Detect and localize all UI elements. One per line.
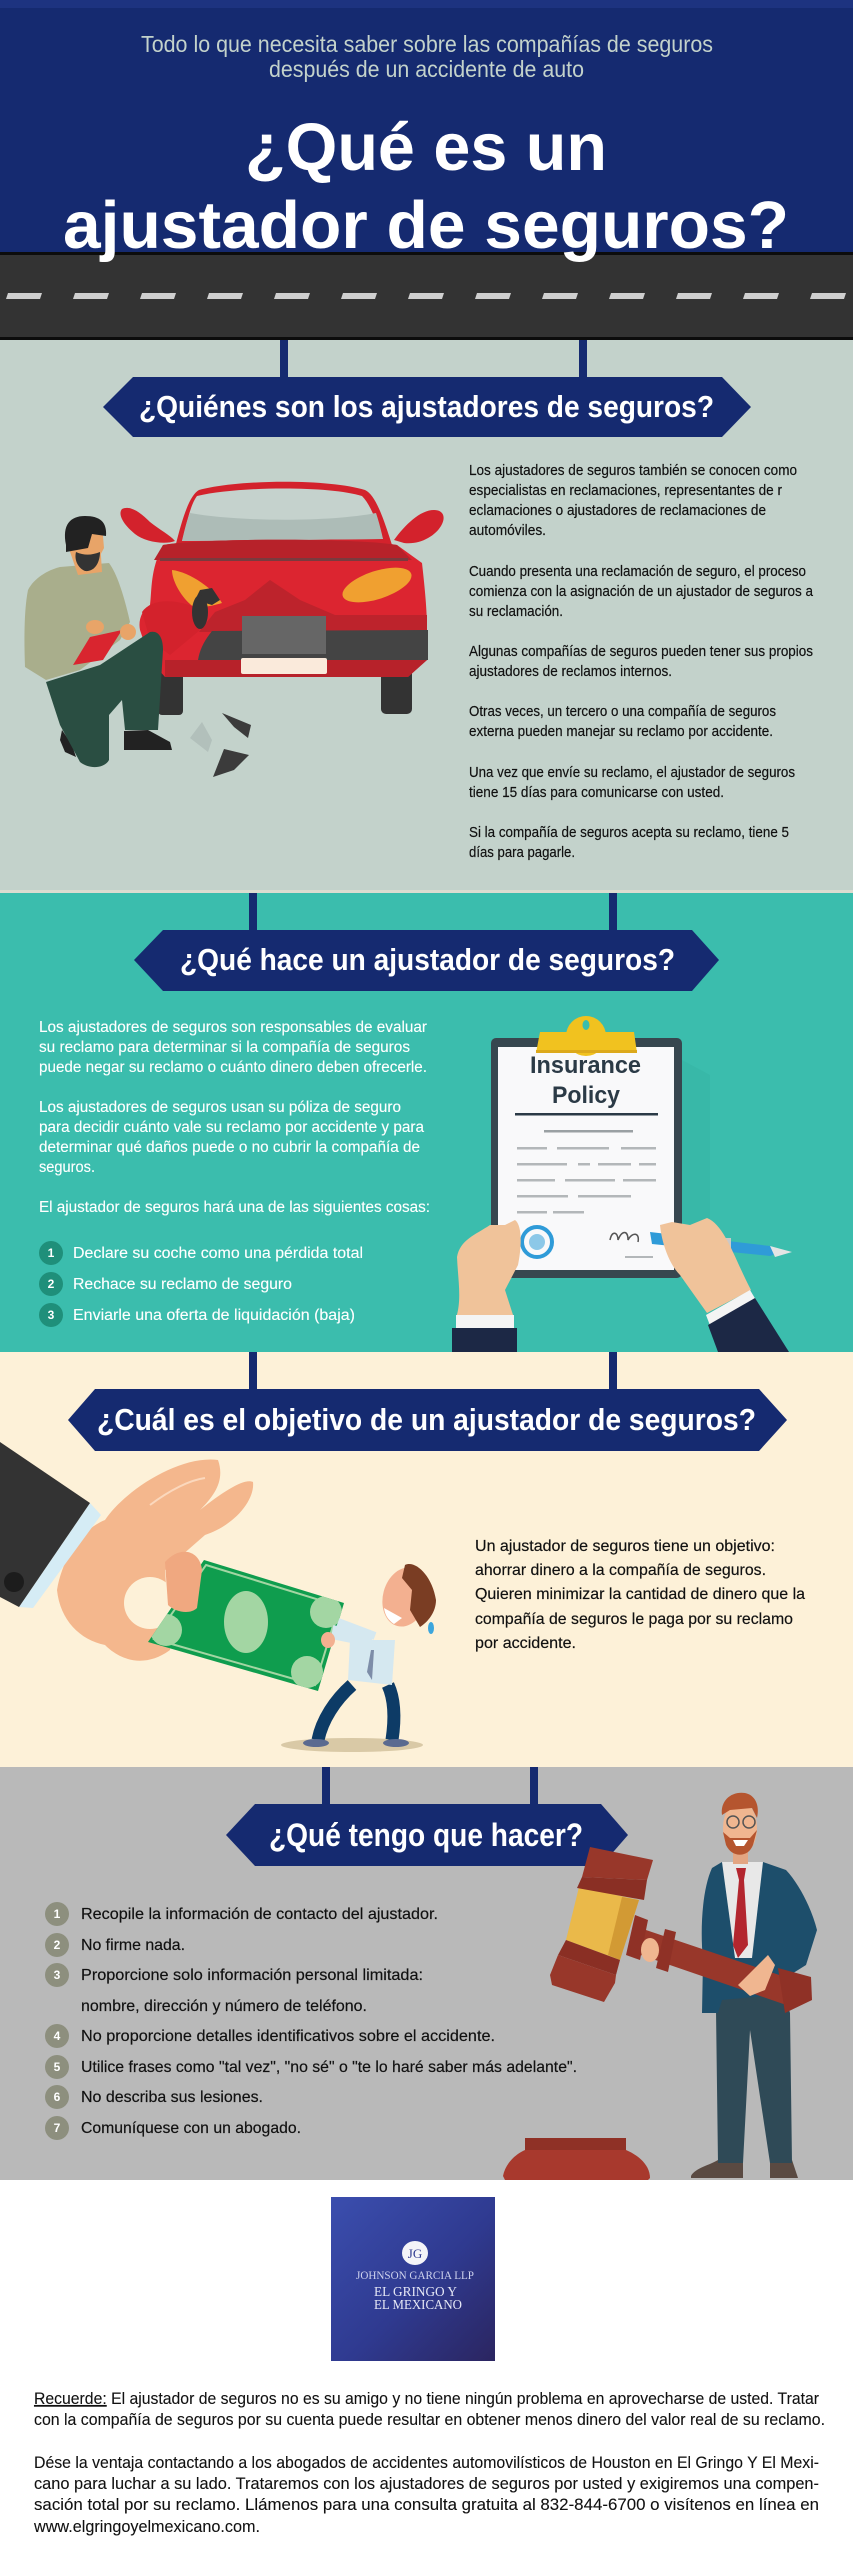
numbered list: qué hacer: 6 [54,2090,61,2104]
numbered list: qué hacer: 3 [54,1968,61,1982]
subtitle [141,31,713,82]
panel: objetivo [0,1352,853,1767]
illustration: insurance policy clipboard [491,1016,710,1290]
numbered list: qué hacer: 2 [54,1938,61,1952]
numbered list: qué hacer: 7 [54,2121,61,2135]
text block: quiénes son: automóviles. [469,523,546,539]
heading banner [226,1804,628,1866]
text block: quiénes son: Si la compañía de seguros acepta su reclamo, tiene 5 [469,825,789,841]
numbered list: qué hacer: 5 [54,2060,61,2074]
numbered list: qué hacer: Utilice frases como "tal vez", "no sé" o "te lo haré saber más adelante". [81,2059,577,2076]
numbered list: qué hacer: Proporcione solo información personal limitada: [81,1967,423,1984]
text block: contacto: www.elgringoyelmexicano.com. [33,2518,260,2536]
text block: recuerde: Recuerde: El ajustador de seguros no es su amigo y no tiene ningún problema en aprovecharse de usted. Tratar [34,2390,819,2408]
text block: recuerde: con la compañía de seguros por su cuenta puede resultar en obtener menos dinero del valor real de su reclamo. [34,2411,825,2429]
text block: objetivo: Un ajustador de seguros tiene un objetivo: [475,1538,775,1555]
numbered list: qué hace: Rechace su reclamo de seguro [73,1276,292,1293]
numbered list: qué hace: 3 [48,1308,55,1322]
text block: objetivo: compañía de seguros le paga por su reclamo [475,1611,793,1628]
panel: qué hace [0,893,853,1352]
text block: qué hace: su reclamo para determinar si la compañía de seguros [39,1039,410,1056]
numbered list: qué hace: 2 [48,1277,55,1291]
illustration: adjuster man [24,516,172,767]
text block: objetivo: ahorrar dinero a la compañía de seguros. [475,1562,766,1579]
text block: qué hace: puede negar su reclamo o cuánto dinero deben ofrecerle. [39,1059,427,1076]
text block: quiénes son [469,463,814,861]
title: ¿Qué es un [245,110,607,185]
text block: recuerde [34,2390,825,2429]
text block: objetivo: Quieren minimizar la cantidad de dinero que la [475,1586,805,1603]
numbered list: qué hace: Enviarle una oferta de liquidación (baja) [73,1307,355,1324]
title [63,110,789,263]
illustration: man pulling money [281,1562,436,1752]
text block: contacto: Dése la ventaja contactando a los abogados de accidentes automovilísticos de Houston en El Gringo Y El Mexi- [34,2454,819,2472]
text block: quiénes son: Los ajustadores de seguros también se conocen como [469,463,797,479]
numbered list: qué hace: 1 [48,1246,55,1260]
numbered list: qué hacer: Recopile la información de contacto del ajustador. [81,1906,438,1923]
text block: qué hace: para decidir cuánto vale su reclamo por accidente y para [39,1119,424,1136]
text block: quiénes son: ajustadores de reclamos internos. [469,664,672,680]
illustration: debris [190,713,251,777]
text block: objetivo [475,1538,805,1652]
text block: qué hace: seguros. [39,1159,95,1176]
heading banner: ¿Qué tengo que hacer? [269,1817,583,1853]
logo: JOHNSON GARCIA LLP [356,2268,474,2282]
text block: quiénes son: externa pueden manejar su reclamo por accidente. [469,724,773,740]
text block: qué hace: Los ajustadores de seguros son responsables de evaluar [39,1019,427,1036]
panel: qué tengo que hacer [0,1767,853,2180]
subtitle: Todo lo que necesita saber sobre las compañías de seguros [141,31,713,57]
logo: EL GRINGO Y [374,2285,457,2300]
text block: quiénes son: Algunas compañías de seguros pueden tener sus propios [469,644,813,660]
text block: quiénes son: días para pagarle. [469,845,575,861]
text block: contacto: sación total por su reclamo. Llámenos para una consulta gratuita al 832-844-6700 o visítenos en línea en [34,2496,819,2514]
heading banner [134,930,719,991]
text block: quiénes son: eclamaciones o ajustadores de reclamaciones de [469,503,766,519]
text block: qué hace: determinar qué daños puede o no cubrir la compañía de [39,1139,420,1156]
illustration: insurance policy clipboard: Policy [552,1082,621,1109]
panel: quiénes son [0,340,853,893]
heading banner [68,1389,787,1451]
illustration: insurance policy clipboard: Insurance [530,1052,641,1079]
logo [331,2197,495,2361]
illustration: gavel block [503,2138,650,2180]
text block: quiénes son: especialistas en reclamaciones, representantes de r [469,483,782,499]
panel: header [0,0,853,340]
text block: quiénes son: comienza con la asignación de un ajustador de seguros a [469,584,814,600]
text block: qué hace: Los ajustadores de seguros usan su póliza de seguro [39,1099,401,1116]
numbered list: qué hacer: Comuníquese con un abogado. [81,2120,301,2137]
title: ajustador de seguros? [63,188,789,263]
text block: quiénes son: Otras veces, un tercero o una compañía de seguros [469,704,776,720]
numbered list: qué hace [39,1241,363,1327]
numbered list: qué hacer: 4 [54,2029,61,2043]
numbered list: qué hacer [45,1902,577,2140]
text block: contacto: cano para luchar a su lado. Trataremos con los ajustadores de seguros por usted y exigiremos una compen- [34,2475,819,2493]
illustration: hands signing [452,1218,792,1352]
logo: EL MEXICANO [374,2298,462,2313]
panel: footer [0,2180,853,2560]
heading banner: ¿Qué hace un ajustador de seguros? [180,942,675,977]
road [0,252,853,340]
heading banner [103,377,751,437]
illustration: damaged car [120,482,444,715]
text block: quiénes son: su reclamación. [469,604,563,620]
illustration: lawyer [691,1793,817,2178]
text block: quiénes son: Cuando presenta una reclamación de seguro, el proceso [469,564,806,580]
text block: quiénes son: Una vez que envíe su reclamo, el ajustador de seguros [469,765,795,781]
subtitle: después de un accidente de auto [269,56,584,82]
illustration: gavel [550,1847,812,2013]
numbered list: qué hacer: No describa sus lesiones. [81,2089,263,2106]
text block: quiénes son: tiene 15 días para comunicarse con usted. [469,785,724,801]
numbered list: qué hacer: 1 [54,1907,61,1921]
text block: objetivo: por accidente. [475,1635,576,1652]
illustration: hand taking money [0,1442,344,1691]
numbered list: qué hace: Declare su coche como una pérdida total [73,1245,363,1262]
logo: JG [408,2246,422,2261]
heading banner: ¿Quiénes son los ajustadores de seguros? [139,389,714,424]
numbered list: qué hacer: No firme nada. [81,1937,185,1954]
text block: qué hace [39,1019,430,1216]
text block: qué hace: El ajustador de seguros hará una de las siguientes cosas: [39,1199,430,1216]
numbered list: qué hacer: No proporcione detalles identificativos sobre el accidente. [81,2028,495,2045]
text block: contacto [33,2454,819,2536]
numbered list: qué hacer: nombre, dirección y número de teléfono. [81,1998,367,2015]
heading banner: ¿Cuál es el objetivo de un ajustador de seguros? [97,1402,756,1437]
